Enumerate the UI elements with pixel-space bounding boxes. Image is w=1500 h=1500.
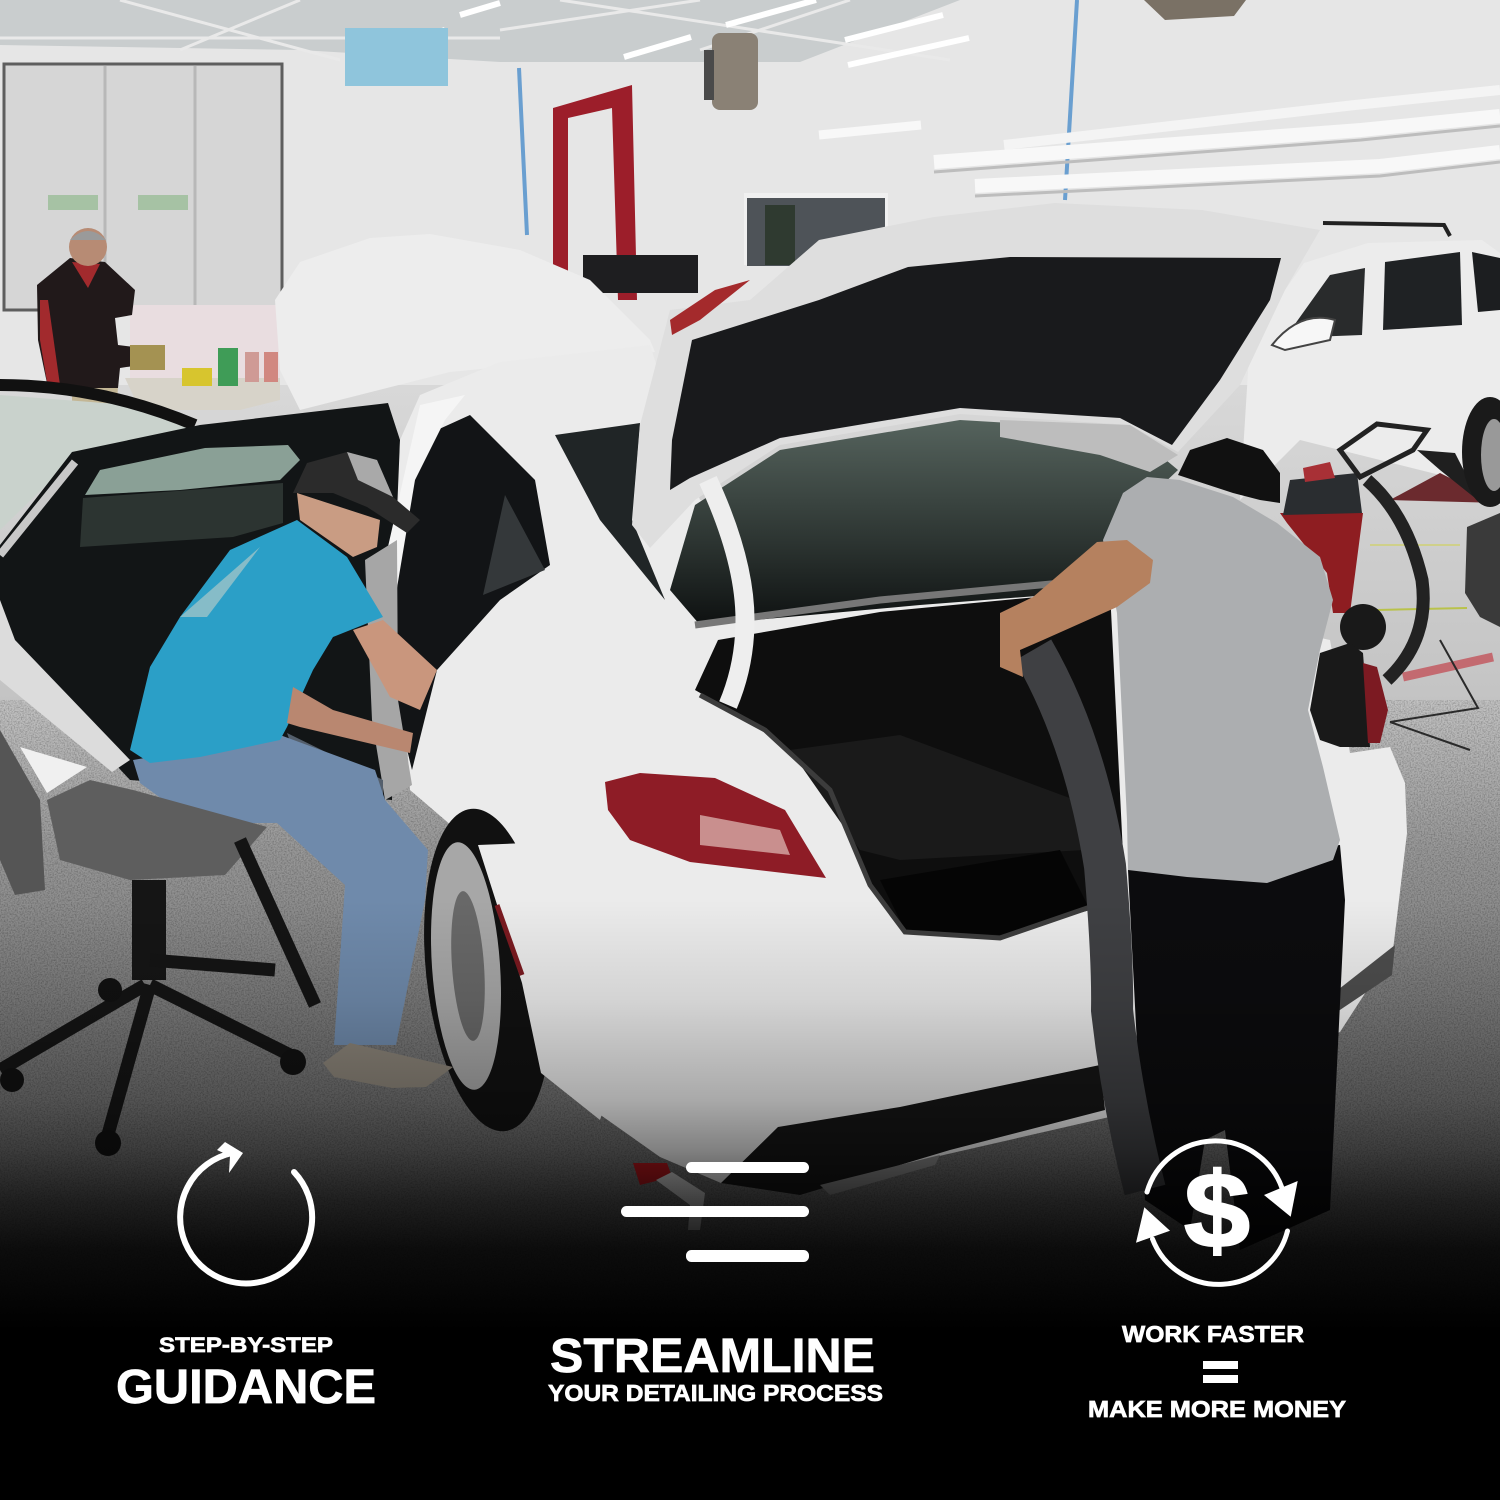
- label: step-by-step: STEP-BY-STEP: [159, 1333, 333, 1357]
- white hose on trunk lid: [708, 480, 745, 705]
- trousers: [1128, 845, 1345, 1250]
- open car hood: [275, 234, 655, 410]
- black vacuum hose: [1033, 650, 1145, 1190]
- shirt: [1103, 477, 1340, 883]
- lower bumper: [721, 1065, 1105, 1195]
- heading: streamline: STREAMLINE: [550, 1330, 875, 1383]
- jeans: [133, 735, 428, 1045]
- table with bottles: [125, 345, 280, 410]
- open rear car door: [0, 385, 400, 800]
- duct pipes: [819, 90, 1500, 196]
- cap: [293, 452, 420, 533]
- far leg: [287, 733, 383, 800]
- lift equipment: [583, 255, 698, 293]
- workshop wall and ceiling: [0, 0, 1500, 420]
- car body: [365, 345, 1407, 1195]
- bottom black band: [0, 1330, 1500, 1500]
- cap: [1178, 438, 1280, 503]
- dark object at right edge: [1465, 513, 1500, 627]
- label: work faster: WORK FASTER: [1122, 1321, 1304, 1347]
- arm: [353, 620, 437, 710]
- column: step-by-step guidance: [116, 1142, 376, 1414]
- icon: dollar with circular arrows: [1136, 1141, 1298, 1284]
- door sill: [365, 540, 412, 800]
- rear wheel: [409, 802, 567, 1138]
- shoe: [323, 1043, 453, 1088]
- man in the background: [37, 228, 160, 445]
- open trunk lid: [632, 203, 1320, 548]
- office chair: [0, 730, 315, 1156]
- label: make more money: MAKE MORE MONEY: [1088, 1396, 1346, 1422]
- icon: circular arrow: [180, 1142, 312, 1283]
- icon: dollar with circular arrows: $: [1184, 1150, 1250, 1270]
- rear fender: [478, 840, 640, 1120]
- rear window: [670, 420, 1178, 625]
- worker arm holding hose: [1000, 540, 1153, 677]
- open trunk compartment: [695, 578, 1125, 938]
- white SUV: [1240, 223, 1500, 507]
- dark doorway: [744, 193, 888, 266]
- equals sign: [1203, 1361, 1238, 1383]
- blue wall unit: [345, 28, 448, 86]
- door opening: [395, 415, 550, 770]
- worker in grey shirt: [1103, 438, 1345, 1250]
- red vehicle lift: [553, 85, 637, 300]
- tail light: [605, 773, 826, 878]
- black bag and right tail light: [1310, 643, 1388, 747]
- red shop vacuum: [1280, 424, 1427, 680]
- heading: guidance: GUIDANCE: [116, 1361, 376, 1414]
- head: [297, 493, 380, 557]
- wheel chock on floor: [633, 1163, 705, 1230]
- workshop floor: [0, 385, 1500, 1500]
- ceiling heater: [704, 33, 758, 110]
- shirt: [130, 520, 383, 763]
- top right heater: [1144, 0, 1246, 20]
- column: streamline: [548, 1162, 883, 1406]
- bottom dark gradient overlay: [0, 900, 1500, 1330]
- worker in teal shirt: [130, 452, 453, 1088]
- column: work faster, make more money: [1088, 1141, 1346, 1422]
- garage door: [4, 64, 282, 385]
- label: your detailing process: YOUR DETAILING PROCESS: [548, 1380, 883, 1406]
- icon: streamline bars: [621, 1162, 809, 1262]
- side window: [555, 423, 665, 600]
